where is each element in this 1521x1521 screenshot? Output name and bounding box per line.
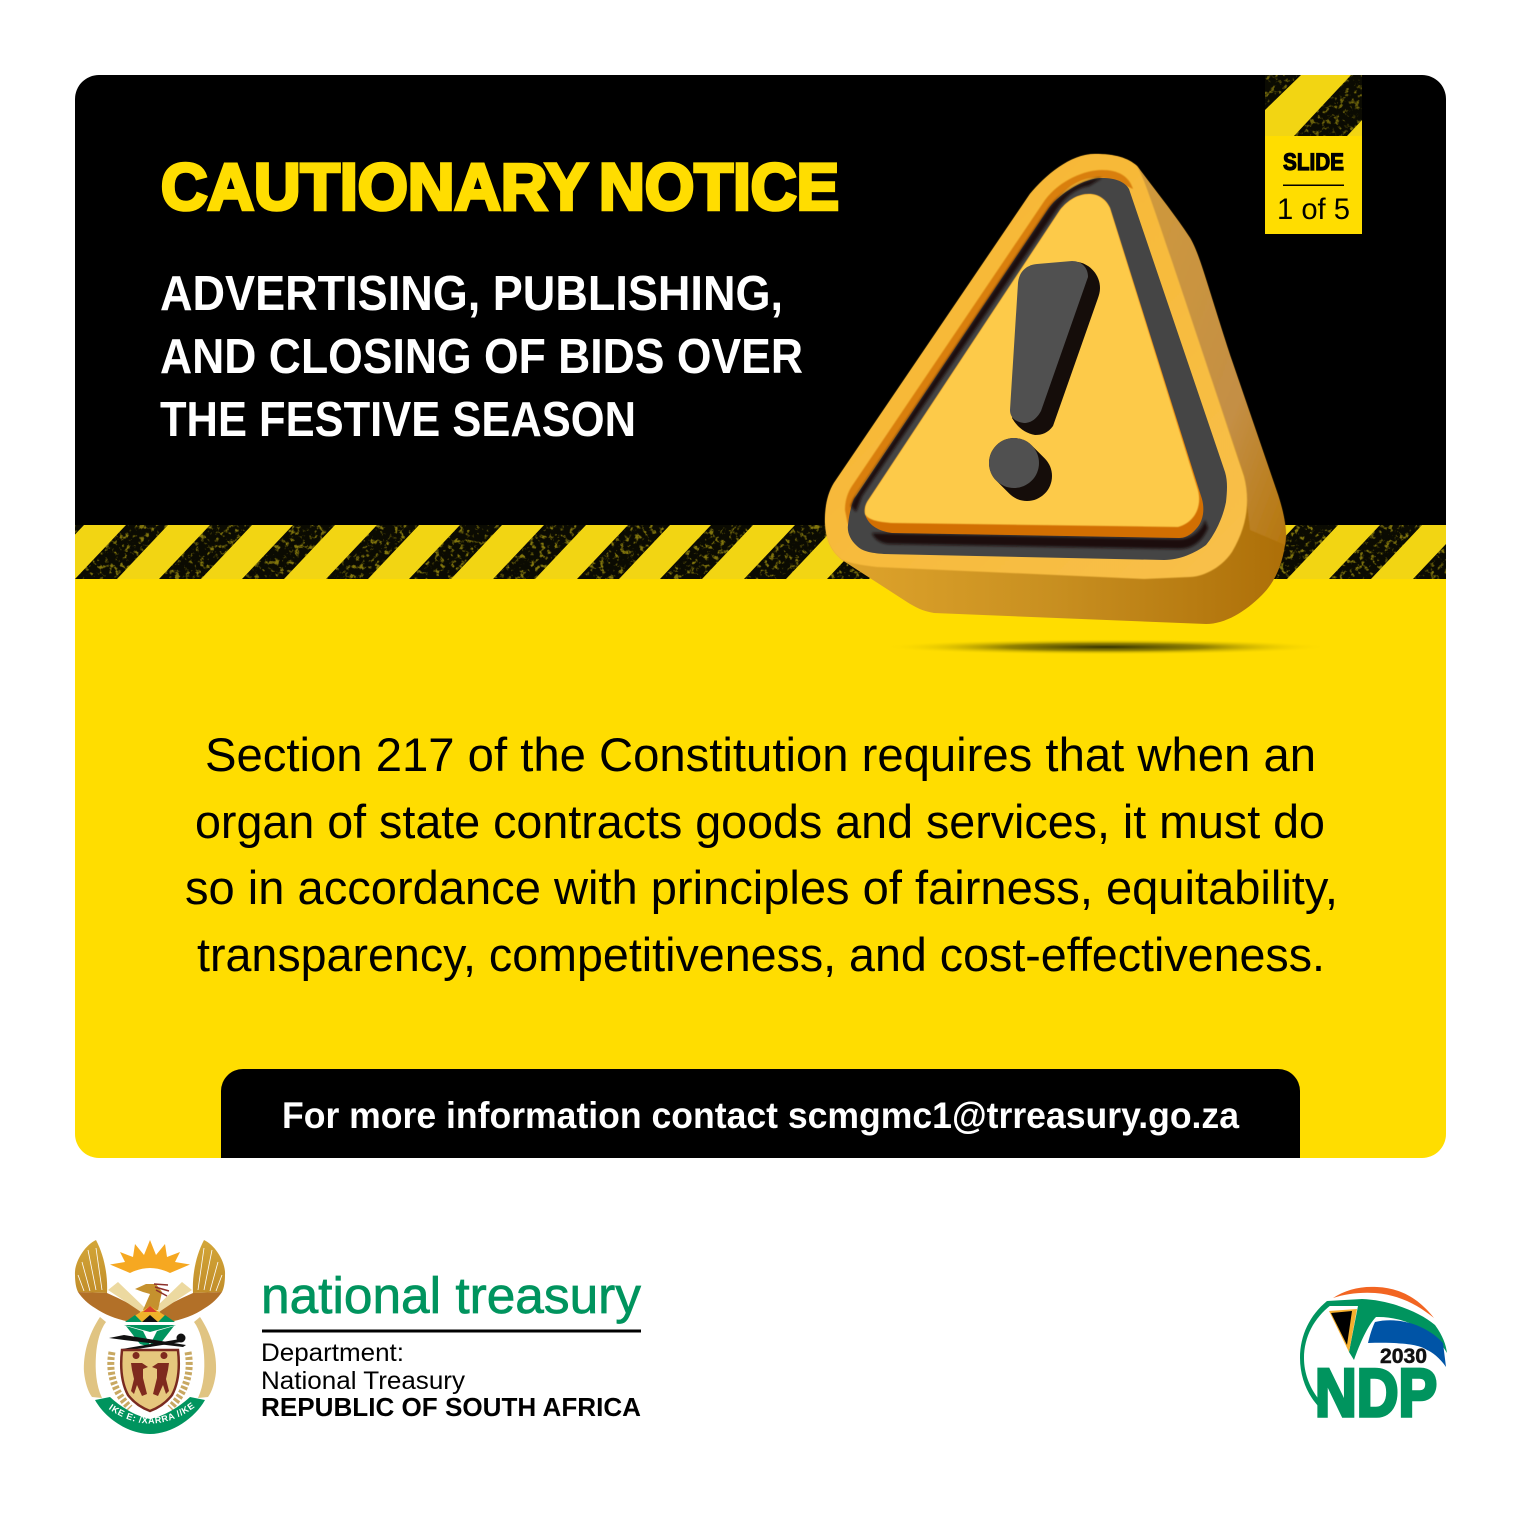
subtitle: ADVERTISING, PUBLISHING, — [160, 267, 783, 321]
logo: NDP 2030 — [1300, 1287, 1447, 1431]
secretary bird — [135, 1284, 162, 1310]
diamond emblem — [124, 1306, 176, 1332]
hazard stripe band — [75, 525, 1446, 579]
right side face — [1137, 166, 1286, 545]
body paragraph: so in accordance with principles of fairness, equitability, — [185, 861, 1338, 914]
contact bar: For more information contact scmgmc1@trreasury.go.za — [282, 1095, 1239, 1136]
subtitle — [160, 267, 803, 447]
year: 2030 — [1380, 1345, 1427, 1368]
slide badge — [1265, 75, 1362, 234]
green ring — [1300, 1301, 1331, 1408]
exclamation bar — [1010, 261, 1100, 435]
title: CAUTIONARY — [161, 150, 588, 224]
left wing — [75, 1240, 145, 1322]
figures — [131, 1352, 169, 1396]
subtitle: AND CLOSING OF BIDS OVER — [160, 330, 803, 384]
exclamation dot — [989, 438, 1039, 488]
wheat — [111, 1352, 189, 1408]
title — [161, 150, 839, 224]
blue band — [1368, 1320, 1446, 1367]
inner dark edge — [851, 178, 1208, 549]
logo: national treasury wordmark: National Treasury — [261, 1367, 466, 1395]
slide badge: SLIDE — [1283, 149, 1344, 176]
tusks — [84, 1317, 216, 1398]
dark recessed ring — [848, 178, 1227, 560]
spear and knobkierie — [109, 1334, 186, 1351]
front rim — [825, 154, 1247, 579]
orange bevel — [845, 170, 1133, 525]
logo: national treasury wordmark: national treasury — [261, 1267, 642, 1324]
motto ribbon: IKE E: /XARRA //KE — [108, 1402, 195, 1424]
motto ribbon — [95, 1397, 205, 1434]
shield — [121, 1350, 179, 1411]
triangle shadow — [884, 639, 1328, 655]
logo: national treasury wordmark: Department: — [261, 1339, 404, 1367]
protea leaves — [126, 1326, 174, 1347]
bird crest — [154, 1284, 169, 1296]
title: NOTICE — [599, 150, 839, 224]
panel: notice card — [75, 75, 1446, 1158]
inner yellow panel — [865, 194, 1199, 527]
subtitle: THE FESTIVE SEASON — [160, 393, 636, 447]
body paragraph — [185, 728, 1338, 981]
slide badge: 1 of 5 — [1277, 193, 1350, 226]
logo: national treasury wordmark — [261, 1267, 642, 1422]
green flag band — [1327, 1299, 1447, 1360]
flag triangle — [1329, 1309, 1357, 1352]
sun — [110, 1240, 190, 1273]
icon: coat of arms — [74, 1240, 226, 1434]
letters: NDP — [1315, 1355, 1437, 1431]
contact bar — [221, 1069, 1300, 1158]
panel: yellow body — [75, 579, 1446, 1158]
right wing — [155, 1240, 225, 1322]
inner panel edge — [865, 194, 1203, 538]
panel: black header — [75, 75, 1446, 525]
body paragraph: transparency, competitiveness, and cost-effectiveness. — [197, 928, 1325, 981]
orange arc — [1333, 1287, 1434, 1318]
wings — [75, 1240, 225, 1322]
icon: warning triangle — [825, 154, 1328, 655]
triangle body — [825, 154, 1286, 624]
body paragraph: organ of state contracts goods and services, it must do — [195, 795, 1325, 848]
logo: national treasury wordmark: REPUBLIC OF SOUTH AFRICA — [261, 1392, 641, 1422]
body paragraph: Section 217 of the Constitution requires that when an — [205, 728, 1316, 781]
